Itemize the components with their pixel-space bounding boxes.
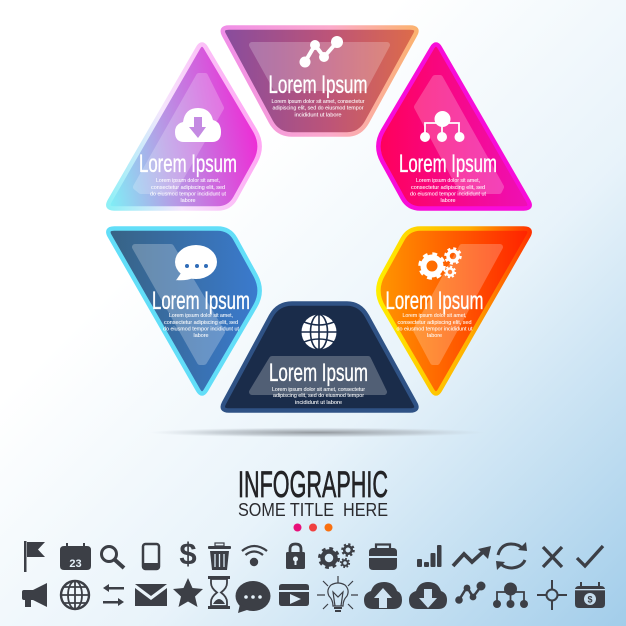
panel: lower left segment: [108, 228, 260, 394]
hexagon-triangle shape: [108, 45, 260, 208]
panel: top chart segment: [223, 28, 416, 134]
body text: [272, 387, 365, 406]
heading: Lorem Ipsum: [269, 359, 368, 387]
heading: Lorem Ipsum: [399, 150, 497, 178]
icon: hierarchy: [493, 582, 528, 608]
icon: hierarchy: [420, 111, 464, 142]
icon row: top: [24, 536, 603, 572]
body text: [163, 313, 240, 339]
body text: adipiscing elit, sed do eiusmod tempor: [272, 106, 364, 112]
icon: cloud upload: [364, 582, 402, 609]
glass highlight: [416, 247, 500, 362]
icon: transfer arrows: [103, 584, 124, 606]
icon: megaphone: [22, 583, 47, 607]
body text: Lorem ipsum dolor sit amet,: [402, 313, 466, 319]
icon: flag: [24, 541, 45, 572]
body text: adipiscing elit, sed do eiusmod tempor: [273, 393, 364, 399]
body text: Lorem ipsum dolor sit amet, consectetur: [272, 99, 365, 105]
heading: Lorem Ipsum: [139, 150, 237, 178]
icon: signal bars: [417, 545, 442, 567]
trapezoid shape: [223, 304, 416, 410]
body text: [150, 178, 227, 204]
icon: line graph nodes: [300, 36, 343, 68]
heading: Lorem Ipsum: [386, 287, 484, 315]
panel: upper left segment: [108, 45, 260, 208]
title: INFOGRAPHIC: [238, 464, 388, 505]
icon: trash: [208, 543, 231, 570]
icon: trend arrow: [453, 546, 491, 566]
icon: video window: [279, 584, 309, 606]
icon: line graph nodes: [455, 582, 486, 604]
body text: do eiusmod tempor incididunt ut: [150, 192, 227, 198]
body text: do eiusmod tempor incididunt ut: [410, 192, 487, 198]
body text: Lorem ipsum dolor sit amet,: [416, 178, 480, 184]
inverted hexagon-triangle shape: [108, 228, 260, 394]
body text: Lorem ipsum dolor sit amet,: [169, 313, 233, 319]
body text: labore: [180, 198, 196, 204]
panel: lower right segment: [378, 228, 530, 394]
icon: cloud download: [409, 582, 447, 609]
icon: calendar dollar: $: [587, 594, 593, 604]
body text: consectetur adipiscing elit, sed: [151, 185, 225, 191]
trapezoid shape: [223, 28, 416, 134]
icon: refresh: [496, 542, 527, 570]
icon: star: [173, 578, 203, 607]
body text: [410, 178, 487, 204]
icon: calendar: [60, 543, 91, 570]
ground shadow: [149, 428, 485, 438]
inverted hexagon-triangle shape: [378, 228, 530, 394]
icon: gears: [320, 544, 354, 568]
icon: calendar dollar: [575, 582, 605, 608]
body text: consectetur adipiscing elit, sed: [398, 320, 472, 326]
icon: speech bubble: [236, 581, 270, 613]
icon: calendar: 23: [69, 558, 82, 570]
body text: do eiusmod tempor incididunt ut: [163, 326, 240, 332]
heading: Lorem Ipsum: [152, 287, 250, 315]
icon: cross: [543, 547, 562, 567]
icon: hourglass: [208, 576, 230, 609]
body text: labore: [194, 333, 209, 339]
body text: Lorem ipsum dolor sit amet, consectetur: [272, 387, 365, 393]
panel: upper right segment: [378, 45, 530, 208]
icon: dollar: $: [179, 536, 197, 571]
glass highlight: [135, 247, 222, 362]
icon: briefcase: [369, 544, 397, 570]
hexagon-triangle shape: [378, 45, 530, 208]
body text: do eiusmod tempor incididunt ut: [396, 326, 473, 332]
body text: consectetur adipiscing elit, sed: [164, 320, 238, 326]
icon: padlock: [286, 544, 305, 569]
panel: bottom segment: [223, 304, 416, 410]
glass highlight: [252, 45, 387, 88]
body text: labore: [440, 198, 456, 204]
icon: crosshair node: [537, 580, 567, 610]
body text: [396, 313, 473, 339]
body text: incididunt ut labore: [294, 112, 342, 118]
heading: Lorem Ipsum: [268, 71, 368, 99]
body text: consectetur adipiscing elit, sed: [411, 185, 485, 191]
icon: speech bubble: [175, 245, 217, 280]
icon: magnifier: [102, 546, 124, 568]
subtitle: SOME TITLE HERE: [238, 500, 388, 520]
icon: globe: [301, 314, 337, 350]
icon: light bulb: [317, 576, 358, 611]
body text: labore: [427, 333, 442, 339]
body text: incididunt ut labore: [295, 400, 342, 406]
glass highlight: [252, 359, 384, 392]
body text: [272, 99, 365, 118]
icon: globe: [61, 581, 89, 609]
glass highlight: [417, 78, 501, 191]
icon: gears: [420, 248, 460, 278]
body text: Lorem ipsum dolor sit amet,: [156, 178, 220, 184]
icon: envelope: [135, 584, 167, 606]
decorative dots: [294, 524, 332, 532]
icon: check: [577, 546, 603, 566]
glass highlight: [136, 76, 221, 191]
icon row: bottom: [22, 576, 605, 613]
icon: wifi: [242, 546, 267, 566]
icon: phone: [143, 544, 159, 569]
icon: cloud download: [175, 108, 221, 142]
